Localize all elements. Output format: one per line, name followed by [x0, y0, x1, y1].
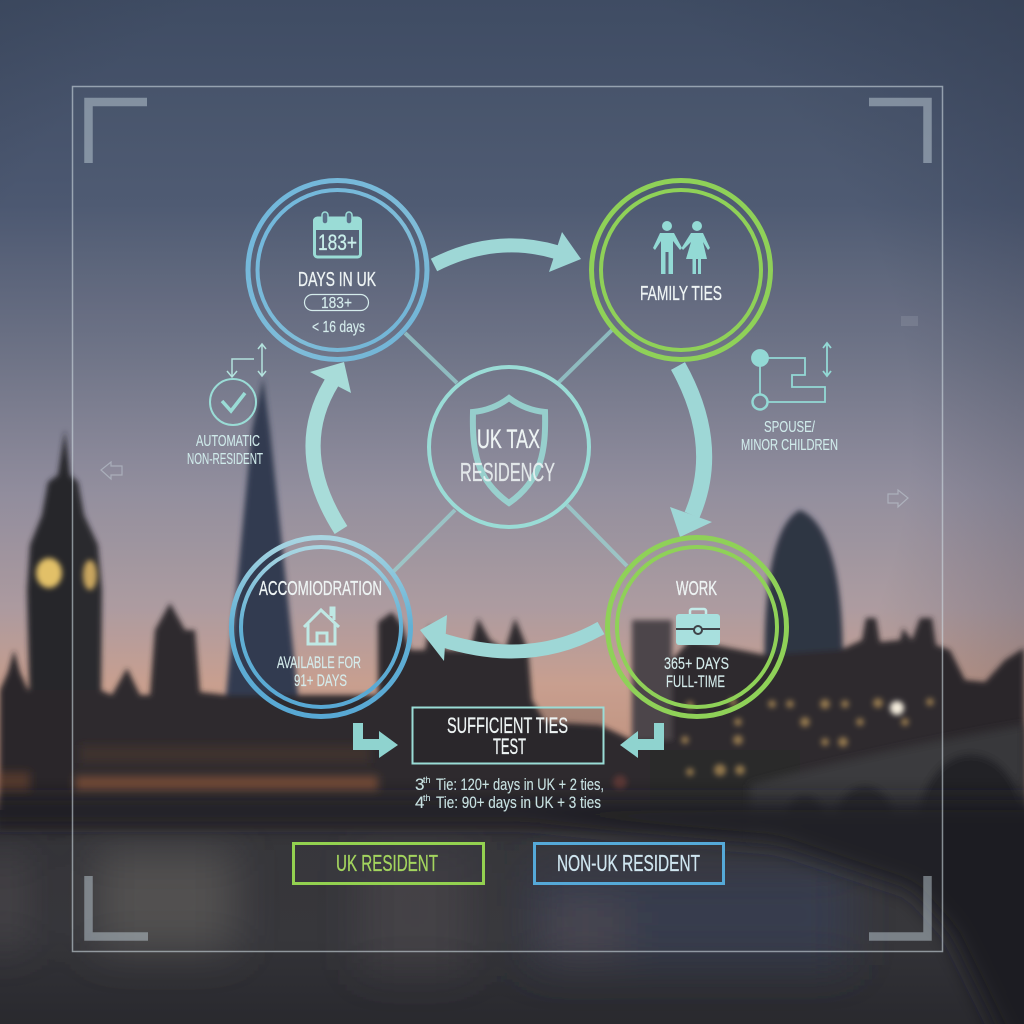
heading: WORK — [676, 578, 717, 600]
side note: automatic non-resident — [187, 344, 266, 468]
dark riverbank — [0, 800, 1024, 1024]
bridge — [750, 725, 1024, 840]
label — [741, 419, 838, 454]
Parliament and riverside silhouettes — [0, 603, 1024, 830]
connector lines — [393, 330, 627, 572]
work duration text: 365+ DAYS — [664, 654, 729, 673]
arrow: family to work — [670, 366, 712, 537]
label: NON-RESIDENT — [187, 451, 263, 468]
availability text — [277, 653, 361, 690]
panel: days in UK — [248, 180, 427, 360]
arrow: work to accommodation — [420, 615, 601, 661]
tie rules text: th — [423, 793, 431, 803]
outer frame — [72, 86, 942, 952]
tie rules text: Tie: 120+ days in UK + 2 ties, — [436, 776, 604, 794]
box: sufficient ties test: TEST — [493, 734, 526, 759]
availability text: 91+ DAYS — [294, 671, 347, 690]
label: MINOR CHILDREN — [741, 437, 838, 454]
city lights — [0, 745, 378, 790]
tie rules text: Tie: 90+ days in UK + 3 ties — [436, 794, 601, 812]
label: SPOUSE/ — [764, 419, 815, 436]
arrow: into test from right — [620, 723, 664, 758]
small decorative arrows — [101, 316, 918, 507]
icon: couple — [653, 221, 710, 274]
centre heading: RESIDENCY — [460, 459, 555, 487]
icon: shield — [473, 398, 545, 503]
pill: 183+ — [321, 295, 352, 312]
threshold text: < 16 days — [312, 319, 365, 336]
side note: spouse and minor children — [741, 343, 838, 454]
arrow: into test from left — [353, 723, 398, 758]
availability text: AVAILABLE FOR — [277, 653, 361, 672]
panel: work — [608, 538, 786, 716]
arrow: accommodation to days — [310, 362, 351, 530]
icon: briefcase — [676, 609, 720, 645]
small arrows — [227, 344, 266, 377]
legend: non-UK resident — [534, 844, 724, 884]
icon: tie diagram — [752, 343, 831, 410]
centre node: UK tax residency — [429, 367, 589, 527]
panel: accommodation — [232, 538, 410, 716]
box: sufficient ties test — [412, 708, 604, 764]
corner brackets — [88, 102, 928, 936]
icon: check circle — [210, 379, 256, 425]
heading: DAYS IN UK — [298, 269, 376, 291]
arrow: days to family — [434, 232, 581, 272]
label — [187, 433, 263, 468]
tie rules text: 4 — [415, 793, 424, 812]
Shard and far towers — [226, 378, 298, 695]
centre heading: UK TAX — [477, 424, 540, 454]
work duration text — [664, 654, 729, 691]
legend: UK resident — [294, 844, 484, 884]
heading: FAMILY TIES — [640, 283, 722, 305]
tie rules text: th — [423, 775, 431, 785]
legend: UK resident: UK RESIDENT — [336, 850, 438, 876]
tie rules text — [415, 775, 604, 812]
icon: house — [304, 608, 339, 644]
clock faces — [36, 558, 97, 590]
panel: family ties — [592, 180, 770, 360]
icon: calendar — [313, 212, 362, 257]
heading: ACCOMIODRATION — [259, 578, 382, 600]
pill — [304, 294, 368, 312]
box: sufficient ties test: SUFFICIENT TIES — [447, 713, 568, 738]
label: AUTOMATIC — [196, 433, 260, 450]
work duration text: FULL-TIME — [666, 672, 725, 691]
icon: calendar: 183+ — [318, 230, 357, 255]
centre heading — [460, 424, 555, 487]
river — [0, 810, 1024, 1024]
tie rules text: 3 — [415, 775, 424, 794]
legend: non-UK resident: NON-UK RESIDENT — [557, 850, 700, 876]
Big Ben — [27, 430, 102, 800]
